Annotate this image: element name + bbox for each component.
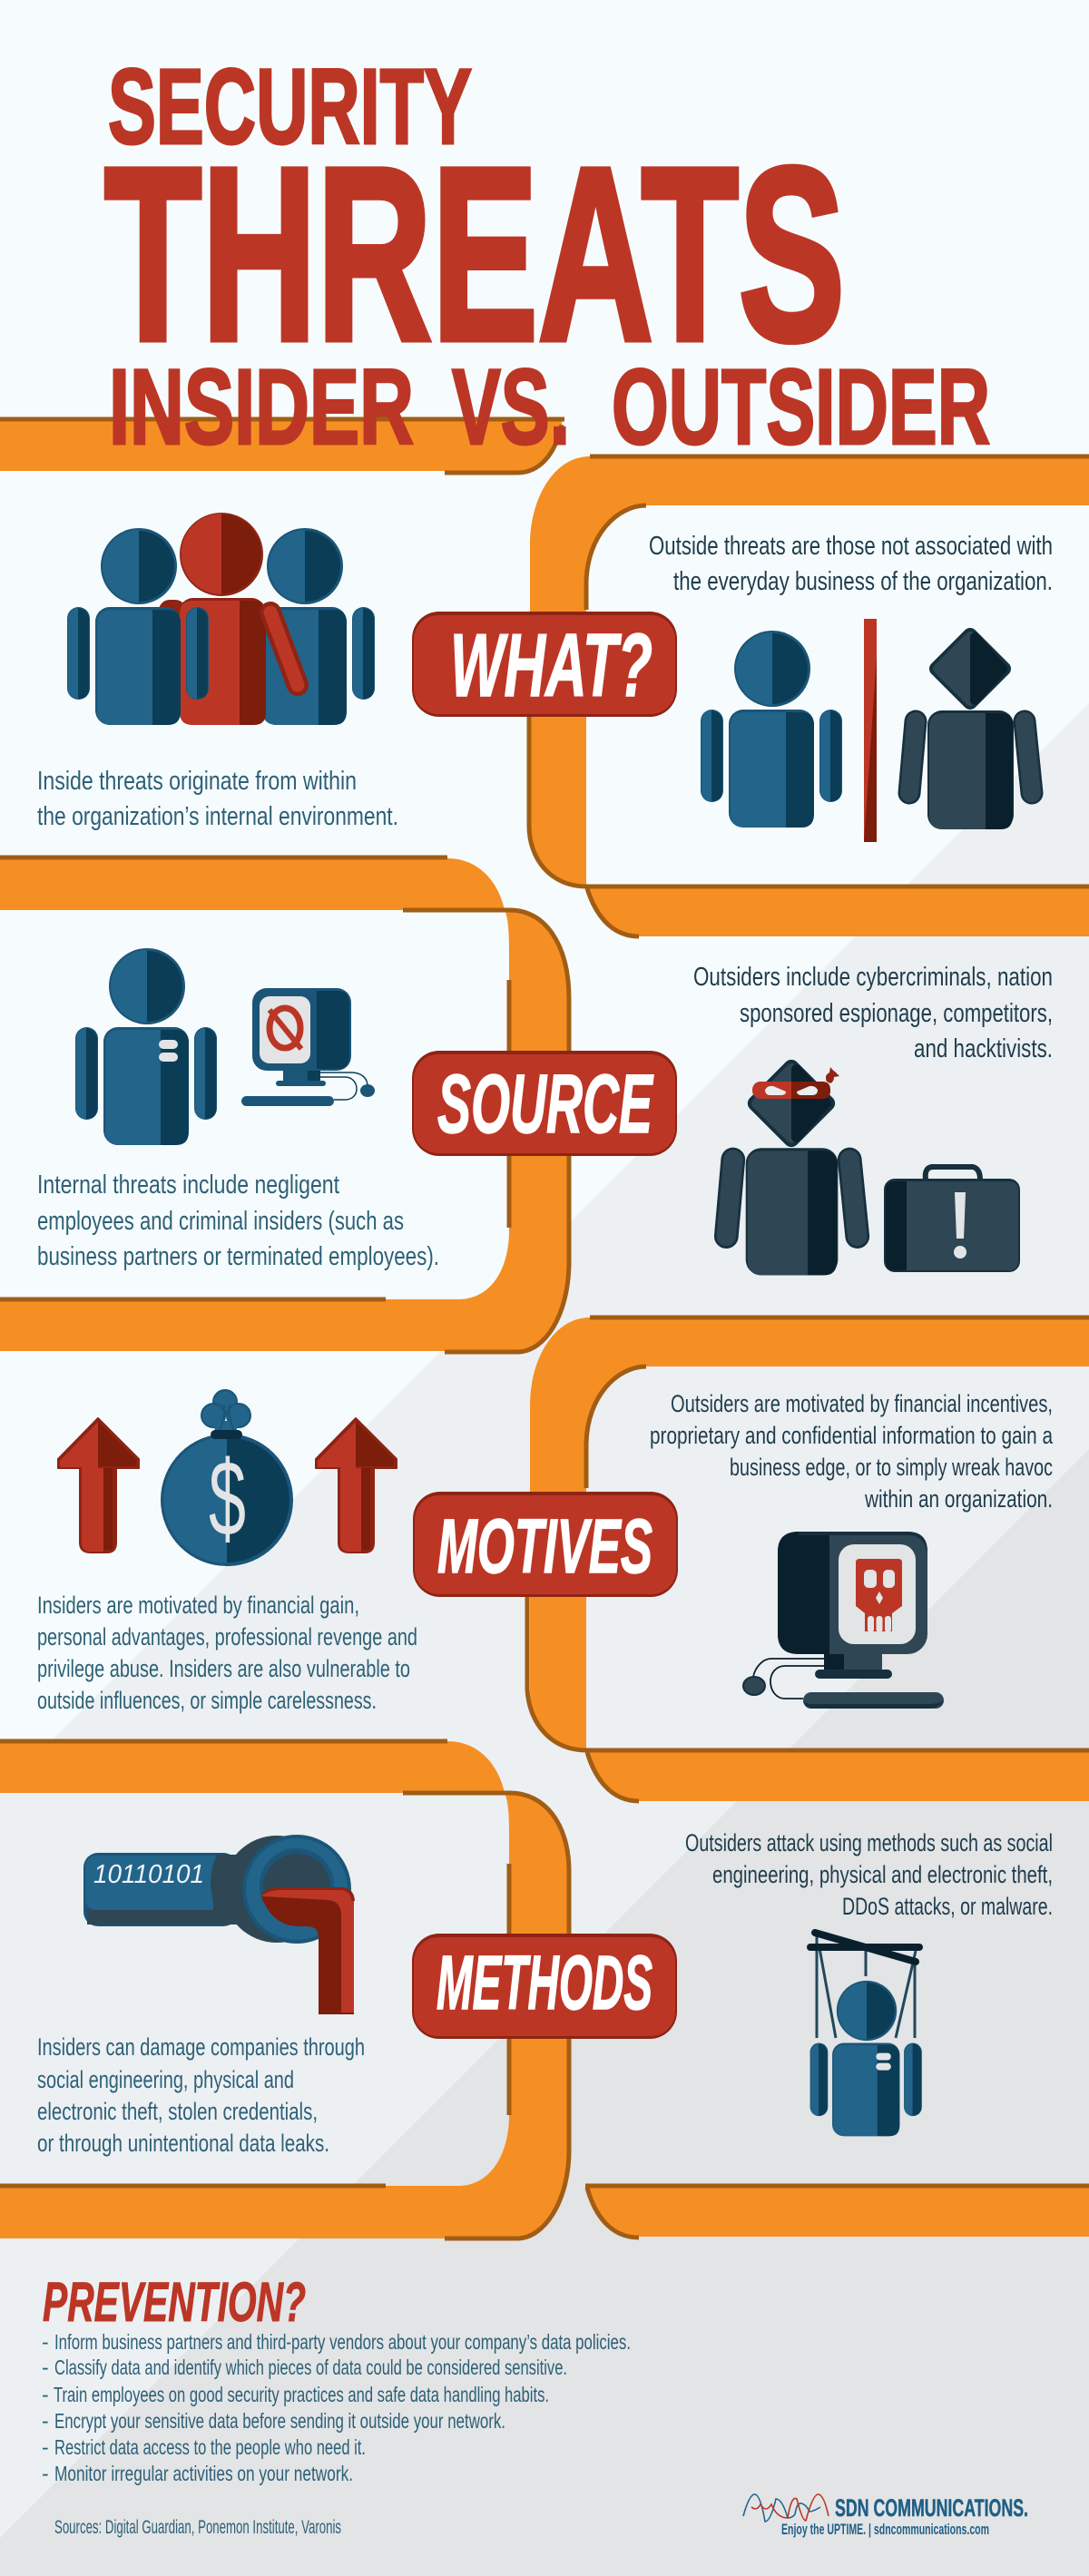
text: outsiders attack xyxy=(685,1829,1053,1920)
text: inside threats: the organization’s internal environment. xyxy=(37,802,398,831)
icon: money bag xyxy=(161,1390,293,1566)
logo: SDN Communications xyxy=(743,2494,1028,2538)
prevention heading: PREVENTION? xyxy=(43,2271,306,2333)
text: insiders motivated xyxy=(37,1592,417,1714)
icon: marionette xyxy=(810,1933,922,2136)
prevention list: - xyxy=(42,2383,49,2406)
badge: motives: MOTIVES xyxy=(437,1503,652,1589)
title: INSIDER xyxy=(109,348,414,467)
prevention list: Monitor irregular activities on your network. xyxy=(54,2462,353,2485)
sources: Sources: Digital Guardian, Ponemon Institute, Varonis xyxy=(54,2517,341,2538)
badge: source: SOURCE xyxy=(437,1058,654,1151)
text: outsiders include: and hacktivists. xyxy=(914,1034,1053,1063)
icon: red arrow right xyxy=(316,1418,397,1552)
icon: money bag: $ xyxy=(209,1439,246,1559)
icon: red divider xyxy=(864,619,877,842)
prevention list xyxy=(42,2330,631,2485)
ribbon: motives outsider xyxy=(527,1317,1089,1801)
ribbon: source insider xyxy=(0,857,569,1352)
text: inside threats: Inside threats originate from within xyxy=(37,767,357,796)
prevention list: - xyxy=(42,2409,49,2433)
icon: employee with badge xyxy=(75,948,217,1145)
icon: briefcase xyxy=(884,1167,1020,1272)
prevention list: Classify data and identify which pieces of data could be considered sensitive. xyxy=(54,2356,567,2379)
icon: locked computer xyxy=(241,988,375,1106)
prevention list: - xyxy=(42,2435,49,2459)
badge: what: WHAT? xyxy=(450,615,652,715)
text: outside threats xyxy=(649,532,1053,596)
text: outsiders include xyxy=(693,963,1053,1063)
prevention list: Train employees on good security practices and safe data handling habits. xyxy=(54,2383,549,2406)
orange ribbons xyxy=(0,419,1089,2238)
text: inside threats xyxy=(37,767,398,831)
text: insiders damage: electronic theft, stolen credentials, xyxy=(37,2098,318,2125)
prevention list: Inform business partners and third-party vendors about your company’s data policies. xyxy=(54,2330,631,2354)
icon: employee xyxy=(701,631,842,828)
text: insiders damage: or through unintentional data leaks. xyxy=(37,2130,329,2157)
text: internal threats xyxy=(37,1170,439,1271)
prevention list: Encrypt your sensitive data before sending it outside your network. xyxy=(54,2409,505,2433)
panel: what outsider xyxy=(649,532,1053,842)
badge: motives xyxy=(413,1492,678,1597)
icon: ninja hacker xyxy=(726,1067,858,1275)
icon: insider group xyxy=(67,513,375,725)
panel: source outsider xyxy=(693,963,1053,1275)
ribbon: methods outsider xyxy=(585,2186,1089,2238)
text: internal threats: Internal threats include negligent xyxy=(37,1170,339,1200)
text: internal threats: employees and criminal insiders (such as xyxy=(37,1207,404,1236)
text: insiders motivated: outside influences, or simple carelessness. xyxy=(37,1687,377,1714)
icon: data pipe leak: 10110101 xyxy=(93,1860,204,1889)
title xyxy=(104,47,990,467)
text: outsiders motivated xyxy=(650,1390,1054,1513)
text: insiders motivated: privilege abuse. Insiders are also vulnerable to xyxy=(37,1655,410,1682)
badge: what xyxy=(412,612,677,717)
ribbon: what outsider xyxy=(529,456,1089,936)
panel: what insider xyxy=(37,513,398,831)
badge: source xyxy=(412,1051,677,1156)
icon: data pipe leak xyxy=(83,1835,355,2014)
badge: methods: METHODS xyxy=(437,1940,652,2025)
text: insiders damage xyxy=(37,2033,365,2157)
panel: motives insider xyxy=(37,1390,417,1714)
panel: methods outsider xyxy=(685,1829,1053,2136)
panel: motives outsider xyxy=(650,1390,1054,1709)
text: insiders damage: Insiders can damage companies through xyxy=(37,2033,365,2061)
text: insiders motivated: Insiders are motivated by financial gain, xyxy=(37,1592,359,1619)
title: SECURITY xyxy=(108,47,472,167)
ribbon: top left xyxy=(0,419,564,473)
icon: red arrow left xyxy=(58,1418,139,1552)
prevention list: Restrict data access to the people who need it. xyxy=(54,2435,366,2459)
prevention list: - xyxy=(42,2462,49,2485)
panel: methods insider xyxy=(37,1835,365,2157)
ribbon: methods insider xyxy=(0,1741,569,2238)
panel: source insider xyxy=(37,948,439,1271)
text: insiders motivated: personal advantages, professional revenge and xyxy=(37,1623,417,1650)
text: internal threats: business partners or terminated employees). xyxy=(37,1242,439,1271)
prevention list: - xyxy=(42,2356,49,2379)
badge: methods xyxy=(412,1934,677,2039)
prevention list: - xyxy=(42,2330,49,2354)
text: insiders damage: social engineering, physical and xyxy=(37,2066,294,2093)
title: VS. xyxy=(452,348,570,467)
icon: infected computer xyxy=(743,1532,944,1709)
icon: outsider figure xyxy=(909,635,1032,829)
